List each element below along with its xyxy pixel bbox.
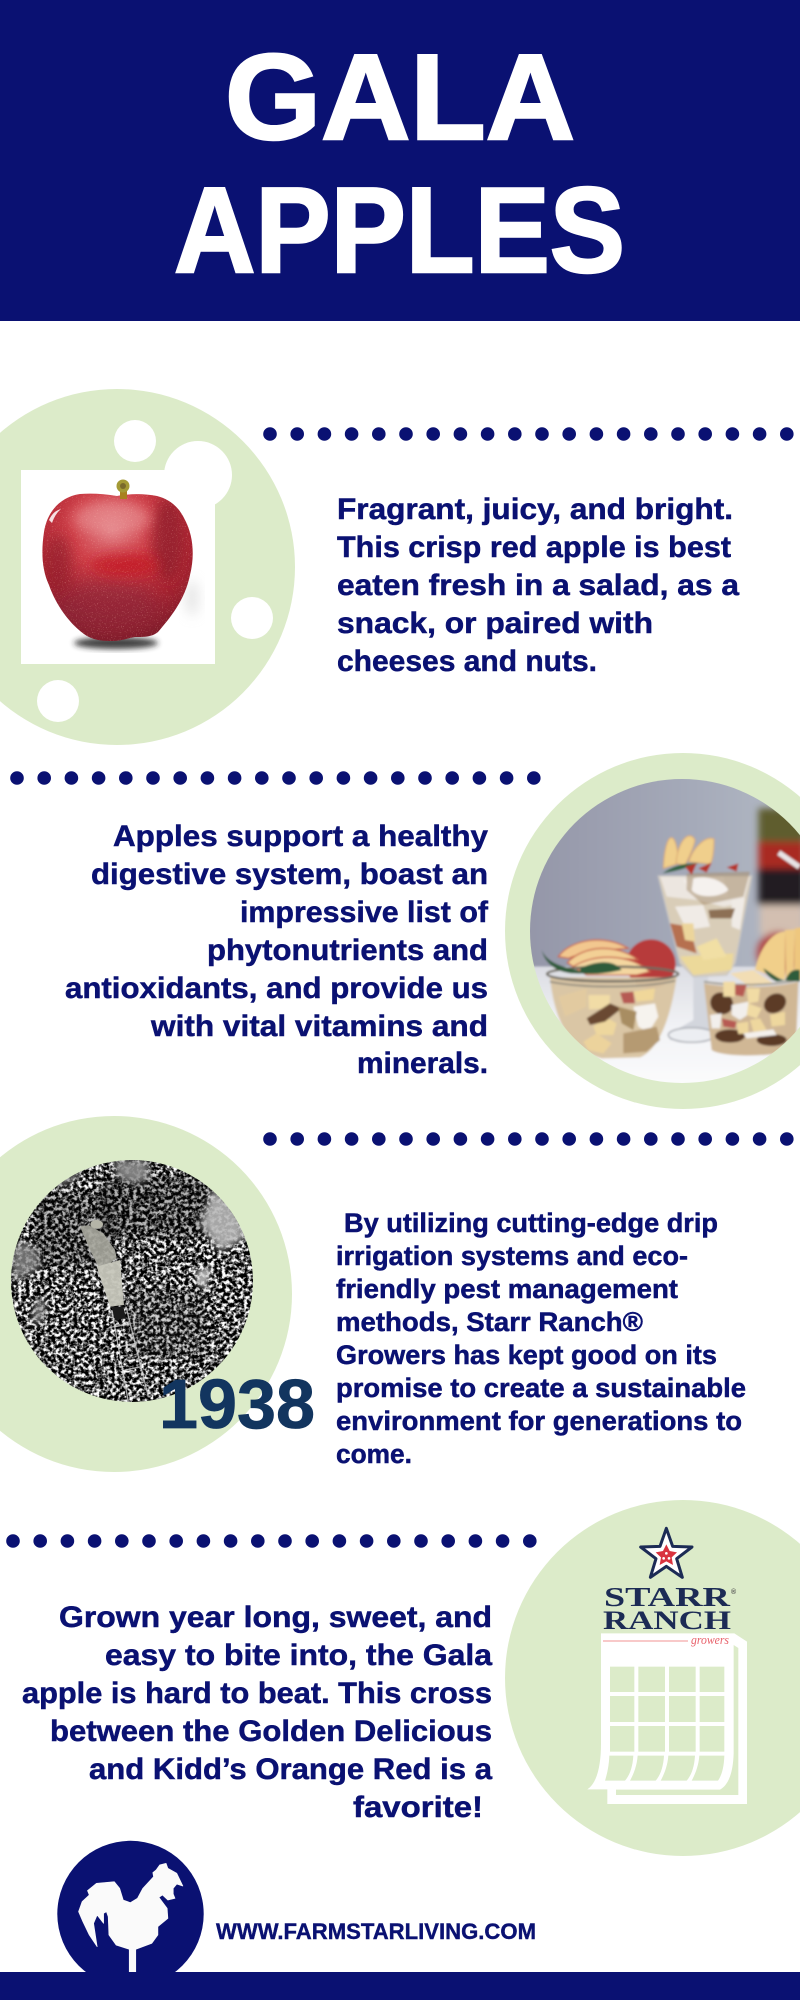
text block 2: antioxidants, and provide us	[65, 972, 488, 1005]
header banner	[0, 0, 800, 321]
text block 2: digestive system, boast an	[91, 858, 488, 891]
icon: red apple photo	[40, 480, 199, 649]
footer bar	[0, 1972, 800, 2000]
text block 1: eaten fresh in a salad, as a	[337, 569, 739, 602]
text block 2: phytonutrients and	[207, 934, 488, 967]
text block 4: and Kidd’s Orange Red is a	[89, 1753, 492, 1786]
title	[174, 29, 625, 298]
panel: orchard photo circle	[0, 1116, 292, 1472]
text block 1	[337, 493, 739, 678]
year label 1938: 1938	[159, 1365, 315, 1443]
dotted divider 3	[270, 1132, 792, 1146]
text block 3: promise to create a sustainable	[336, 1373, 746, 1403]
text block 4: between the Golden Delicious	[50, 1715, 492, 1748]
orchard photo	[10, 1159, 254, 1403]
text block 2: with vital vitamins and	[150, 1010, 488, 1043]
text block 3: environment for generations to	[336, 1406, 742, 1436]
parfait photo	[523, 773, 800, 1090]
logo: Starr Ranch Growers	[603, 1528, 737, 1647]
text block 3: methods, Starr Ranch®	[336, 1307, 643, 1337]
text block 3: irrigation systems and eco-	[336, 1241, 688, 1271]
title: APPLES	[174, 162, 625, 298]
panel: calendar circle	[505, 1500, 800, 1856]
text block 4: apple is hard to beat. This cross	[22, 1677, 492, 1710]
text block 2: minerals.	[357, 1047, 488, 1080]
text block 4: Grown year long, sweet, and	[59, 1601, 492, 1634]
text block 1: This crisp red apple is best	[337, 531, 731, 564]
title: GALA	[225, 29, 575, 165]
text block 3	[336, 1208, 746, 1469]
text block 4: favorite!	[353, 1791, 483, 1824]
dotted divider 1	[270, 427, 792, 441]
text block 3: By utilizing cutting-edge drip	[344, 1208, 718, 1238]
text block 3: friendly pest management	[336, 1274, 678, 1304]
icon: rooster badge	[57, 1841, 204, 1987]
text block 1: snack, or paired with	[337, 607, 653, 640]
website url: WWW.FARMSTARLIVING.COM	[216, 1919, 536, 1944]
logo: Starr Ranch Growers: growers	[691, 1632, 729, 1647]
text block 1: Fragrant, juicy, and bright.	[337, 493, 733, 526]
text block 2	[65, 820, 489, 1080]
dotted divider 4	[13, 1534, 532, 1548]
panel: apple circle	[0, 389, 295, 745]
logo: Starr Ranch Growers: RANCH	[603, 1606, 731, 1635]
text block 4	[22, 1601, 492, 1824]
text block 2: impressive list of	[240, 896, 489, 929]
icon: calendar	[587, 1633, 747, 1804]
text block 3: come.	[336, 1439, 412, 1469]
logo: Starr Ranch Growers: STARR	[604, 1582, 731, 1612]
text block 3: Growers has kept good on its	[336, 1340, 717, 1370]
dotted divider 2	[17, 771, 536, 785]
logo: Starr Ranch Growers: ®	[731, 1588, 737, 1596]
text block 1: cheeses and nuts.	[337, 645, 597, 678]
text block 4: easy to bite into, the Gala	[105, 1639, 492, 1672]
text block 2: Apples support a healthy	[113, 820, 488, 853]
panel: parfait photo circle	[505, 753, 800, 1109]
